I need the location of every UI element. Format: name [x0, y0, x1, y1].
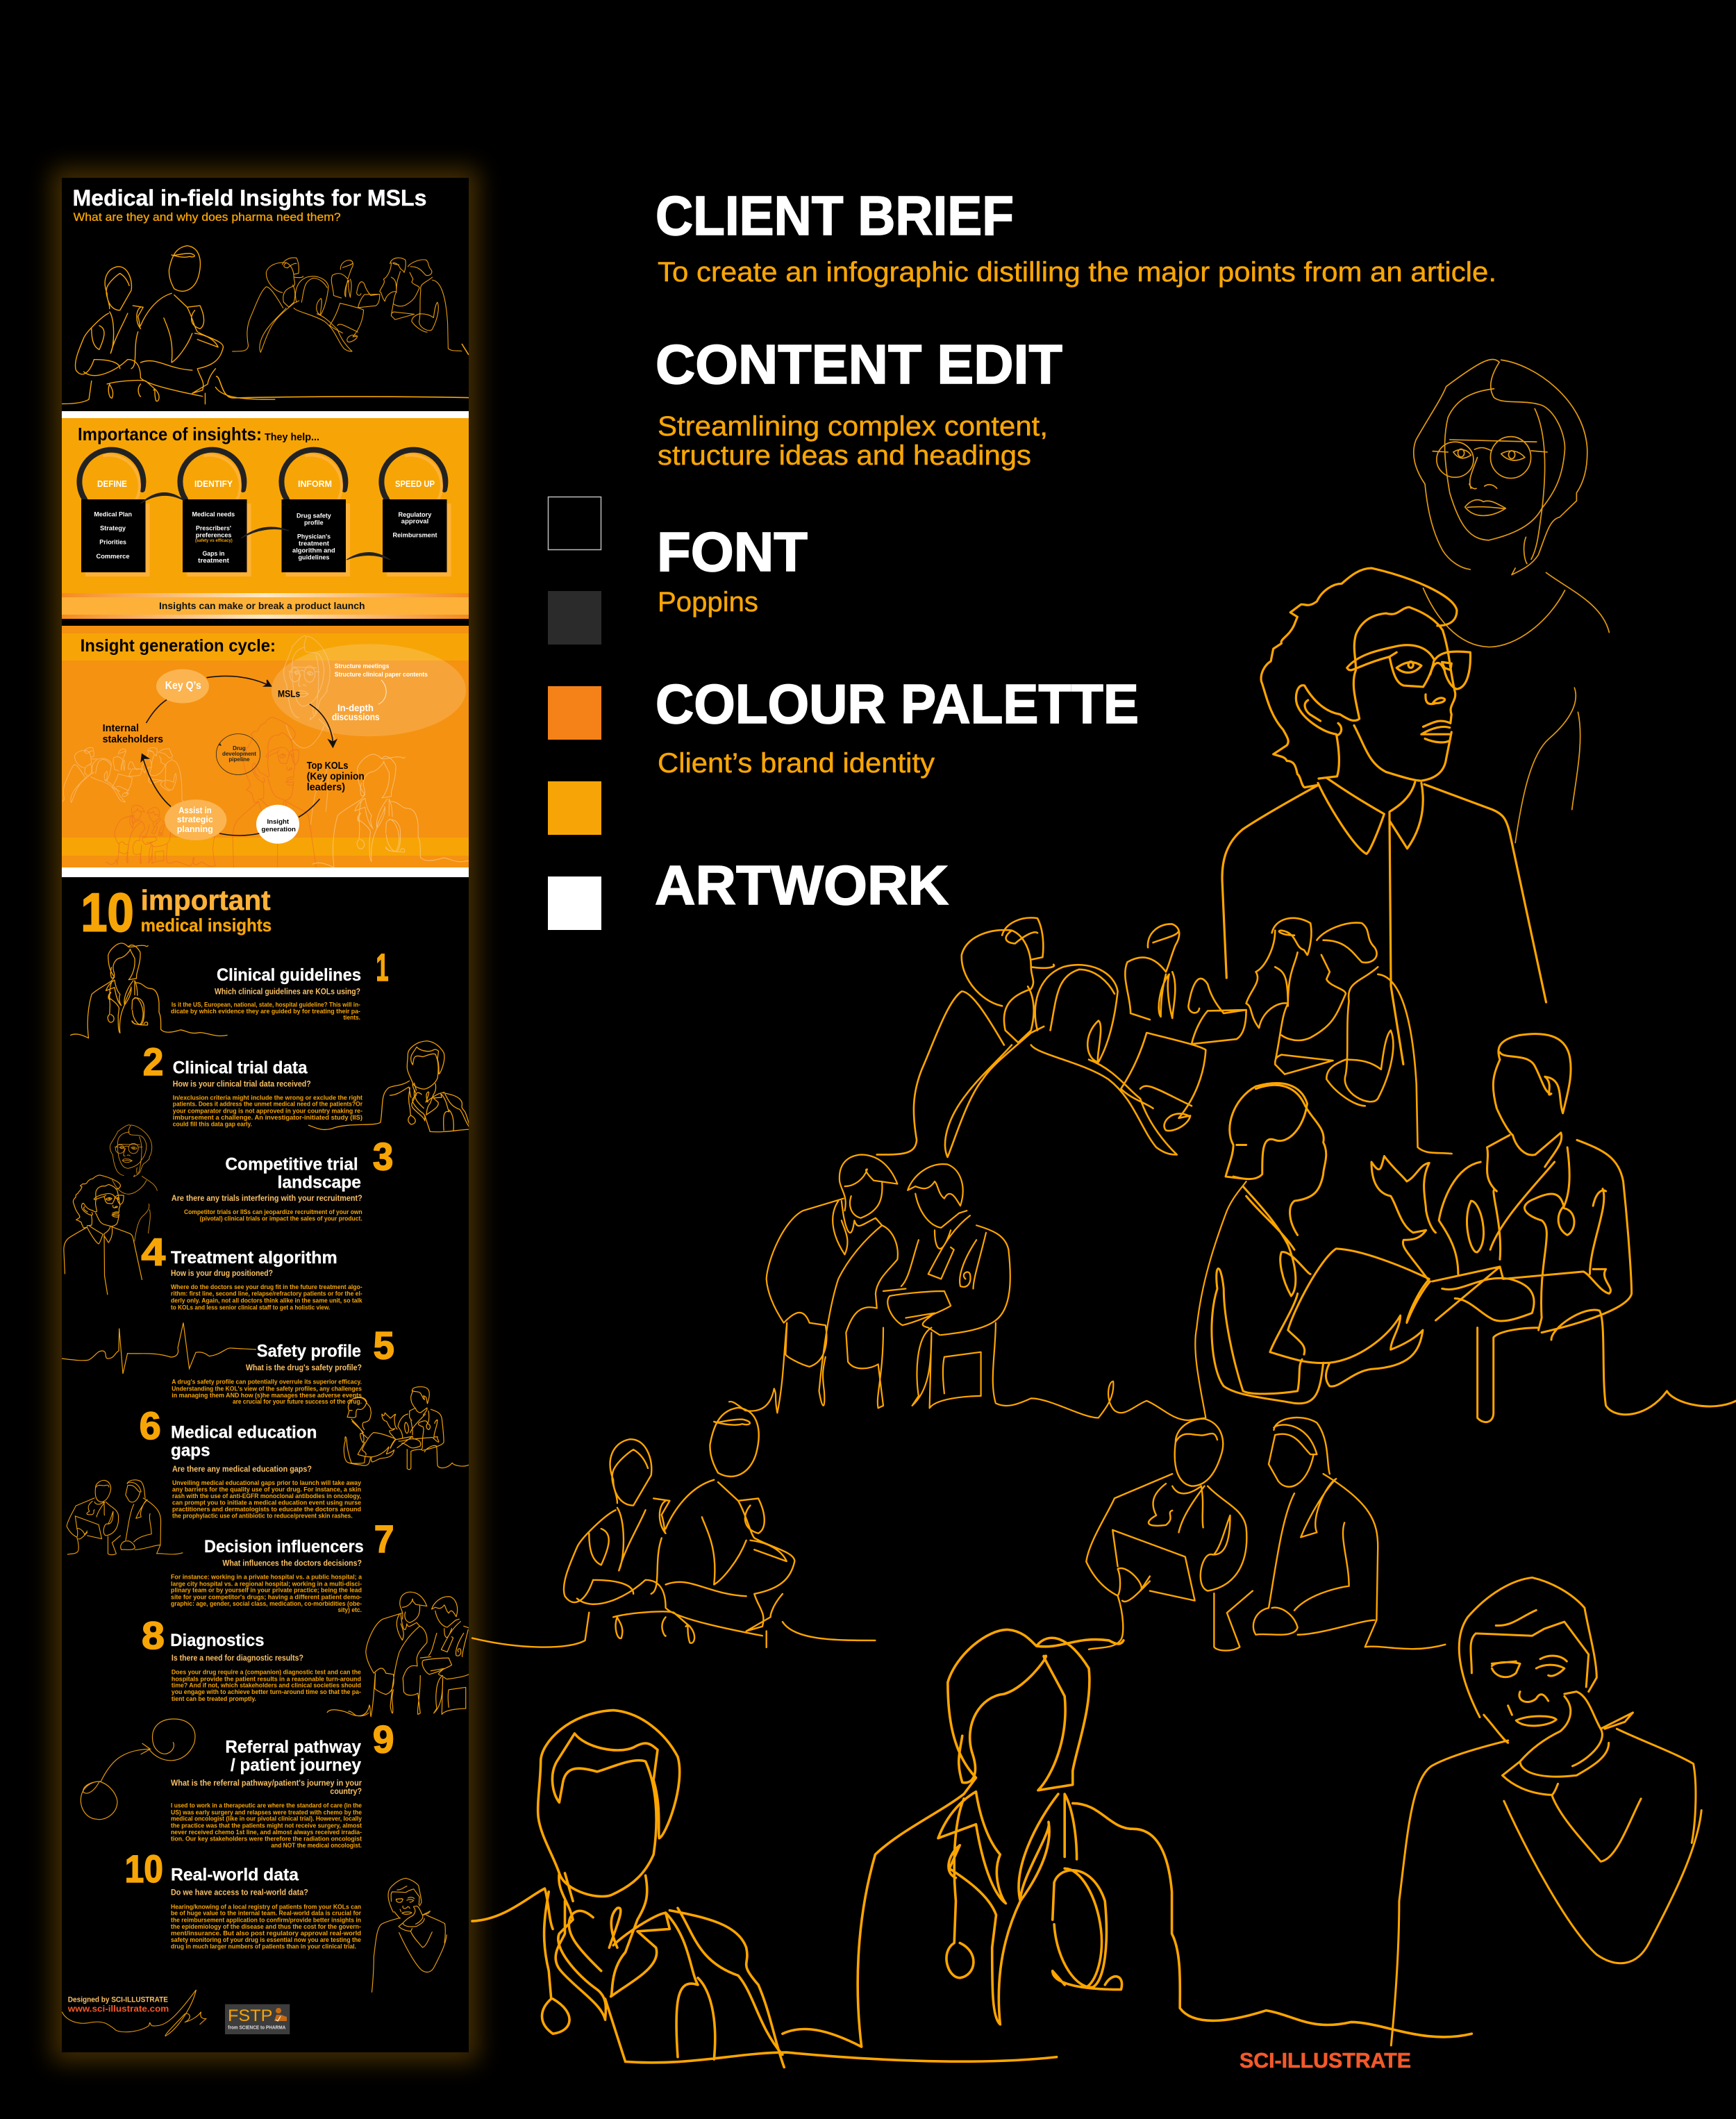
content edit text: Streamlining complex content, [658, 411, 1048, 442]
insight 10: real-world data [125, 1847, 361, 1950]
meeting notes: Structure meetings [335, 663, 389, 670]
heading: artwork: ARTWORK [655, 854, 949, 916]
insight 4: treatment algorithm: to KOLs and less senior clinical staff to get a holistic view. [171, 1304, 330, 1311]
insight 9: referral pathway / patient journey: the practice was that the patients might not receive surgery, almost [171, 1822, 362, 1829]
node: insight generation: Insight [267, 818, 290, 826]
logo: FSTP: FSTP [228, 2006, 272, 2025]
column: speed up: Regulatory [399, 511, 432, 519]
column: speed up: approval [401, 518, 428, 526]
insight 7: decision influencers: For instance: working in a private hospital vs. a public hospital; a [171, 1574, 362, 1581]
insight 8: diagnostics: Does your drug require a (companion) diagnostic test and can the [172, 1669, 361, 1676]
label: internal stakeholders: stakeholders [103, 733, 163, 745]
illustration: pathway arrow squiggle [81, 1719, 195, 1820]
insight 3: competitive trial landscape: landscape [278, 1173, 361, 1193]
insight 7: decision influencers: sity) etc. [337, 1606, 362, 1613]
heading: font: FONT [657, 521, 808, 583]
insight 3: competitive trial landscape [172, 1135, 393, 1222]
insight 6: medical education gaps: 6 [140, 1404, 161, 1447]
insight 7: decision influencers: graphic: age, gender, social class, medication, co-morbidities (obe- [171, 1600, 362, 1607]
insight 6: medical education gaps: any barriers for the quality use of your drug. For instance, a skin [172, 1486, 361, 1493]
font name: Poppins [658, 587, 758, 617]
insight 2: clinical trial data: could fill this data gap early. [173, 1121, 252, 1128]
insight 6: medical education gaps: can prompt you to initiate a medical education event using nurse [172, 1499, 361, 1506]
insight 9: referral pathway / patient journey: tion. Our key stakeholders were therefore the radiation oncologist [171, 1835, 362, 1842]
insight 2: clinical trial data [143, 1040, 362, 1128]
section heading: Insight generation cycle: [81, 636, 276, 656]
meeting notes: Structure clinical paper contents [335, 671, 428, 679]
insight 5: safety profile: 5 [374, 1324, 394, 1368]
insight 6: medical education gaps [140, 1404, 362, 1520]
heading: 10 important medical insights: important [141, 884, 271, 916]
insight 2: clinical trial data: Clinical trial data [173, 1058, 308, 1078]
large artwork: meeting group [877, 917, 1452, 1157]
label: top KOLs: leaders) [307, 782, 345, 793]
banner: product launch: Insights can make or break a product launch [159, 601, 365, 611]
large artwork: two doctors with clipboard [1086, 1418, 1445, 1651]
insight 10: real-world data: be of huge value to the internal team. Real-world data is crucial for [171, 1910, 361, 1917]
insight 4: treatment algorithm: Where do the doctors see your drug fit in the future treatment algo- [171, 1283, 362, 1290]
in-depth discussions [332, 702, 380, 722]
illustration: seated doctors [62, 245, 276, 404]
node: assist in strategic planning: strategic [177, 814, 213, 824]
panel: insight generation cycle [55, 626, 499, 911]
illustration: baseline trail [216, 344, 469, 398]
insight 2: clinical trial data: imbursement a challenge. An investigator-initiated study (IIS) [173, 1114, 362, 1121]
large artwork: male doctor [472, 1710, 1057, 2067]
insight 10: real-world data: Hearing/knowing of a local registry of patients from your KOLs can [171, 1903, 361, 1910]
illustration: thinking man [372, 1878, 446, 1992]
insight 7: decision influencers: Decision influencers [204, 1537, 364, 1556]
faint illustration in ellipse [363, 676, 467, 751]
column: identify: Prescribers' [196, 525, 231, 533]
column: speed up: Reimbursment [393, 532, 437, 540]
large artwork: person with curly hair and glasses [1222, 568, 1546, 1064]
section subheading: They help... [265, 431, 319, 443]
label: internal stakeholders: Internal [103, 722, 139, 734]
column: inform: treatment [299, 540, 330, 547]
insight 7: decision influencers: plinary team or by yourself in your private practice; being the lead [171, 1587, 362, 1594]
subtitle: What are they and why does pharma need them? [74, 210, 341, 224]
insight 10: real-world data: ment/insurance. But also post regulatory approval real-world [171, 1930, 361, 1937]
insight 4: treatment algorithm: rithm: first line, second line, relapse/refractory patients or for the el- [171, 1290, 362, 1297]
insight 5: safety profile: in managing them AND how (s)he manages these adverse events [172, 1392, 362, 1399]
section heading: Importance of insights: [78, 424, 262, 444]
insight 4: treatment algorithm: How is your drug positioned? [171, 1268, 273, 1278]
insight 9: referral pathway / patient journey: What is the referral pathway/patient's journey in your [171, 1778, 362, 1788]
panel glow [62, 178, 469, 2052]
centre: drug development pipeline [216, 734, 260, 774]
insight 2: clinical trial data: In/exclusion criteria might include the wrong or exclude the right [173, 1094, 362, 1101]
illustration: male doctor [308, 1041, 544, 1133]
column: identify: Medical needs [192, 510, 235, 518]
illustration: doctor and patient [344, 1387, 469, 1470]
heading: 10 important medical insights: medical insights [141, 915, 272, 936]
column: inform: Physician's [297, 533, 331, 540]
node: insight generation: generation [261, 826, 296, 833]
large artwork: thinking man [1391, 1577, 1701, 2045]
client brief text: To create an infographic distilling the major points from an article. [658, 257, 1496, 288]
insight 10: real-world data: the reimbursement application to confirm/provide better insights in [171, 1916, 361, 1923]
insight 1: clinical guidelines: Which clinical guidelines are KOLs using? [215, 986, 360, 996]
connector brush strokes [141, 492, 390, 560]
insight 10: real-world data: Real-world data [171, 1865, 299, 1885]
insight 9: referral pathway / patient journey: country? [330, 1786, 362, 1796]
insight 10: real-world data: drug in much larger numbers of patients than in your clinical trial. [171, 1943, 356, 1950]
insight 3: competitive trial landscape: Are there any trials interfering with your recruitment? [172, 1193, 362, 1203]
illustration: two doctors with clipboard [67, 1480, 183, 1555]
insight 8: diagnostics: 8 [142, 1613, 165, 1657]
in-depth discussions: In-depth [337, 702, 374, 713]
meeting notes [335, 664, 428, 678]
in-depth discussions: discussions [332, 711, 380, 722]
column: inform [281, 450, 350, 576]
label: MSLs: MSLs [278, 688, 300, 699]
column: identify: IDENTIFY [194, 479, 233, 489]
title: Medical in-field Insights for MSLs [72, 185, 426, 210]
column: identify: preferences [196, 532, 232, 540]
footer credit: Designed by SCI-ILLUSTRATE [68, 1996, 168, 2004]
insight 2: clinical trial data: your comparator drug is not approved in your country making re- [173, 1107, 362, 1114]
column: define: Medical Plan [94, 510, 132, 518]
insight 5: safety profile [172, 1324, 394, 1405]
divider [62, 867, 469, 877]
logo: FSTP [225, 2004, 290, 2034]
panel: importance of insights [62, 418, 469, 619]
illustration: meeting group [233, 258, 462, 352]
insight 7: decision influencers: 7 [374, 1517, 394, 1561]
insight 5: safety profile: are crucial for your future success of the drug. [233, 1398, 362, 1405]
node: assist in strategic planning: Assist in [178, 805, 212, 815]
column: inform: INFORM [298, 479, 332, 489]
node: assist in strategic planning: planning [177, 824, 213, 834]
insight 10: real-world data: the epidemiology of the disease and thus the cost for the govern- [171, 1923, 361, 1930]
insight 5: safety profile: What is the drug's safety profile? [246, 1363, 362, 1372]
insight 3: competitive trial landscape: Competitor trials or IISs can jeopardize recruitment of your own [184, 1208, 362, 1215]
insight 7: decision influencers [171, 1517, 394, 1613]
insight 6: medical education gaps: Medical education [171, 1423, 317, 1443]
column: inform: guidelines [299, 554, 329, 561]
insight 3: competitive trial landscape: (pivotal) clinical trials or impact the sales of your product. [200, 1215, 362, 1222]
insight 9: referral pathway / patient journey: Referral pathway [225, 1737, 361, 1756]
illustration: female doctor [71, 943, 227, 1038]
column: inform: profile [304, 520, 324, 526]
insight 1: clinical guidelines: Is it the US, European, national, state, hospital guideline? This will in- [172, 1001, 360, 1008]
insight 9: referral pathway / patient journey: medical oncologist (like in our pivotal clinical trial). However, locally [171, 1815, 362, 1822]
insight 8: diagnostics [142, 1613, 361, 1702]
insight 2: clinical trial data: patients. Does it address the unmet medical need of the patients?Or [173, 1101, 362, 1108]
divider [62, 411, 469, 418]
column: define: Strategy [100, 525, 126, 533]
colour palette text: Client’s brand identity [658, 748, 935, 779]
column: define [79, 450, 150, 576]
insight 8: diagnostics: tient can be treated promptly. [172, 1695, 256, 1702]
bracket [378, 680, 386, 704]
infographic panel [62, 189, 469, 2036]
large artwork: woman with glasses [1414, 360, 1609, 842]
insight 6: medical education gaps: Are there any medical education gaps? [172, 1464, 312, 1474]
centre: drug development pipeline: Drug [233, 745, 246, 751]
insight 5: safety profile: A drug's safety profile can potentially overrule its superior efficacy. [172, 1379, 362, 1386]
faint illustrations [62, 635, 469, 867]
label: top KOLs [307, 761, 365, 793]
insight 9: referral pathway / patient journey: / patient journey [231, 1755, 361, 1775]
illustration: two doctors with tablet [327, 1592, 590, 1720]
node: assist in strategic planning [165, 799, 226, 840]
brand name: SCI-ILLUSTRATE [1240, 2048, 1411, 2072]
heading: content edit: CONTENT EDIT [656, 333, 1062, 395]
insight 9: referral pathway / patient journey: never received chemo 1st line, and almost always received irradia- [171, 1829, 362, 1836]
insight 1: clinical guidelines: dicate by which evidence they are guided by for treating their pa- [171, 1008, 360, 1015]
heading: colour palette: COLOUR PALETTE [656, 673, 1139, 735]
insight 5: safety profile: Understanding the KOL's view of the safety profiles, any challenges [172, 1385, 362, 1392]
content edit text [658, 411, 1048, 471]
content edit text: structure ideas and headings [658, 440, 1031, 471]
banner: product launch [62, 593, 469, 619]
column: identify: (safety vs efficacy) [195, 539, 233, 543]
insight 10: real-world data: safety monitoring of your drug is essential now you are testing the [171, 1936, 361, 1943]
node: key questions [156, 670, 209, 703]
insight 1: clinical guidelines: Clinical guidelines [217, 965, 361, 985]
centre: drug development pipeline: development [222, 751, 256, 757]
insight 6: medical education gaps: rash with the use of anti-EGFR monoclonal antibodies in oncology, [172, 1493, 361, 1499]
insight 4: treatment algorithm: derly only. Again, not all doctors think alike in the same unit, so talk [171, 1297, 362, 1304]
footer credit: www.sci-illustrate.com [67, 2004, 169, 2014]
column: speed up [381, 450, 451, 576]
insight 9: referral pathway / patient journey [171, 1717, 394, 1849]
insight 7: decision influencers: What influences the doctors decisions? [222, 1558, 362, 1568]
insight 9: referral pathway / patient journey: and NOT the medical oncologist. [271, 1842, 362, 1849]
heading: 10 important medical insights: 10 [81, 881, 134, 942]
insight 8: diagnostics: you engage with to achieve better turn-around time so that the pa- [172, 1688, 361, 1695]
column: define: Commerce [96, 553, 129, 560]
panel background [62, 178, 469, 2052]
insight 6: medical education gaps: gaps [171, 1440, 210, 1460]
column: define: DEFINE [97, 479, 127, 489]
insight 4: treatment algorithm: Treatment algorithm [171, 1248, 337, 1268]
insight 9: referral pathway / patient journey: US) was early surgery and relapses were treated with chemo by the [171, 1809, 362, 1815]
label: internal stakeholders [103, 722, 163, 745]
column: identify: Gaps in [203, 550, 225, 558]
insight 5: safety profile: Safety profile [257, 1342, 361, 1361]
column: inform: Drug safety [297, 513, 331, 520]
insight 10: real-world data: 10 [125, 1847, 163, 1891]
insight 3: competitive trial landscape: Competitive trial [225, 1154, 358, 1174]
insight 9: referral pathway / patient journey: 9 [373, 1717, 394, 1761]
insight 6: medical education gaps: practitioners and dermatologists to educate the doctors around [172, 1506, 361, 1513]
centre: drug development pipeline: pipeline [228, 756, 250, 763]
insight 7: decision influencers: site for your competitor's drugs; having a different patient demo- [171, 1593, 362, 1600]
illustration: ECG line [62, 1322, 256, 1374]
insight 4: treatment algorithm [141, 1230, 362, 1311]
insight 8: diagnostics: time? And if not, which stakeholders and clinical societies should [172, 1681, 361, 1688]
column: identify [180, 450, 251, 576]
illustration: woman and curly-haired person [64, 1125, 157, 1295]
cycle arrows [141, 676, 336, 836]
insight 8: diagnostics: hospitals provide the patient results in a reasonable turn-around [172, 1675, 361, 1682]
label: top KOLs: (Key opinion [307, 772, 365, 783]
highlight ellipse [272, 644, 466, 736]
footer credit [67, 1996, 169, 2014]
signature: for [62, 1990, 206, 2036]
insight 10: real-world data: Do we have access to real-world data? [171, 1887, 308, 1897]
column: speed up: SPEED UP [395, 479, 435, 489]
insight 8: diagnostics: Diagnostics [170, 1631, 264, 1650]
node: insight generation [256, 805, 299, 844]
large artwork: female doctor [783, 1629, 1471, 2047]
insight 3: competitive trial landscape: 3 [373, 1135, 393, 1178]
colour swatches [548, 497, 601, 930]
insight 6: medical education gaps: the prophylactic use of antibiotic to reduce/prevent skin rashes. [172, 1513, 353, 1520]
insight 9: referral pathway / patient journey: I used to work in a therapeutic are where the standard of care (in the [171, 1802, 362, 1809]
insight 4: treatment algorithm: 4 [141, 1230, 165, 1274]
large artwork: two seated doctors [472, 1408, 875, 1647]
insight 1: clinical guidelines [171, 945, 389, 1021]
insight 6: medical education gaps: Unveiling medical educational gaps prior to launch will take away [172, 1479, 362, 1486]
heading: client brief: CLIENT BRIEF [656, 185, 1014, 247]
large artwork: two doctors with tablet [729, 1154, 1246, 1420]
column: identify: treatment [198, 557, 230, 565]
insight 1: clinical guidelines: tients. [343, 1014, 360, 1021]
column: define: Priorities [99, 539, 126, 547]
node: key questions: Key Q’s [165, 680, 201, 692]
heading: 10 important medical insights [81, 881, 272, 942]
large artwork: doctor talking to patient [1212, 1034, 1736, 1422]
insight 8: diagnostics: Is there a need for diagnostic results? [172, 1653, 303, 1663]
insight 2: clinical trial data: 2 [143, 1040, 163, 1083]
column: inform: algorithm and [292, 547, 335, 555]
label: top KOLs: Top KOLs [307, 761, 349, 772]
insight 2: clinical trial data: How is your clinical trial data received? [173, 1079, 311, 1089]
logo: FSTP: from SCIENCE to PHARMA [228, 2025, 286, 2031]
insight 1: clinical guidelines: 1 [376, 945, 389, 989]
insight 7: decision influencers: large city hospital vs. a regional hospital; working in a multi-disci- [171, 1580, 362, 1587]
